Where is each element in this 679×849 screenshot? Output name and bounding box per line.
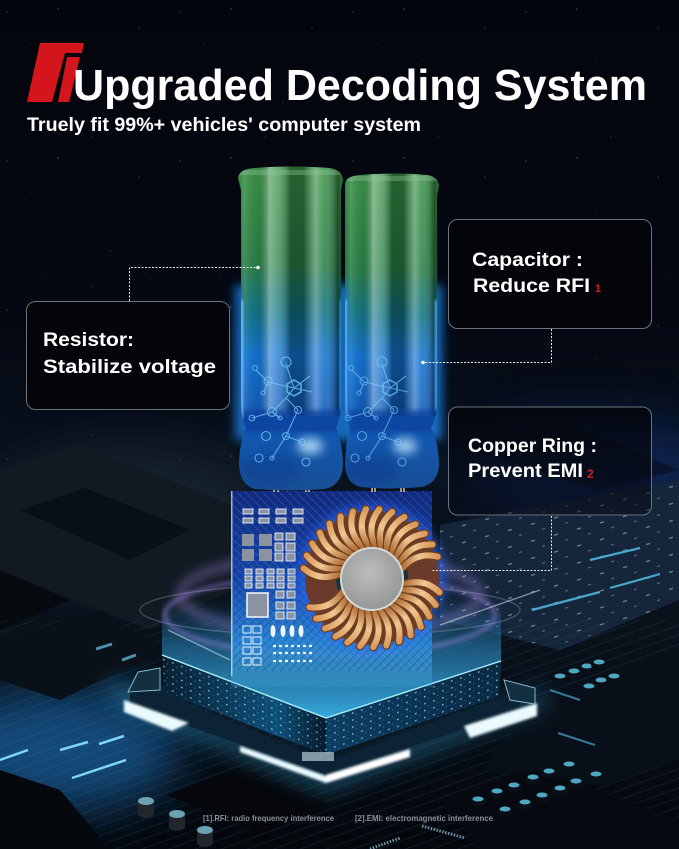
capacitor right [342,172,442,488]
callout: resistor: Resistor: [43,329,134,351]
circuit board components [242,509,303,619]
callout: resistor: Stabilize voltage [43,356,216,378]
energy rings [140,555,540,660]
title: Upgraded Decoding System [73,61,647,110]
callout: capacitor: Reduce RFI [473,275,590,297]
callout: capacitor: Capacitor : [472,249,583,271]
copper ring [298,504,446,652]
subtitle: Truely fit 99%+ vehicles' computer system [27,115,421,136]
logo [27,43,84,102]
hologram glow cube [162,600,501,718]
footnote: RFI: [1].RFI: radio frequency interference [203,813,334,823]
circuit board floor [0,548,679,849]
capacitor left [235,165,345,490]
circuit board card [231,488,432,687]
leader line: copper ring [432,516,552,570]
callout: copper ring: Copper Ring : [468,435,597,457]
leader line: capacitor [421,329,552,364]
callout: resistor [26,302,230,410]
footnote: EMI: [2].EMI: electromagnetic interference [355,813,493,823]
glowing base strips [124,700,537,783]
leader line: resistor [130,266,260,301]
central chip [110,655,545,790]
callout: capacitor: 1 [595,283,601,295]
callout: capacitor [448,220,652,328]
callout: copper ring [448,407,652,515]
callout: copper ring: Prevent EMI [468,460,583,482]
callout: copper ring: 2 [587,467,594,481]
